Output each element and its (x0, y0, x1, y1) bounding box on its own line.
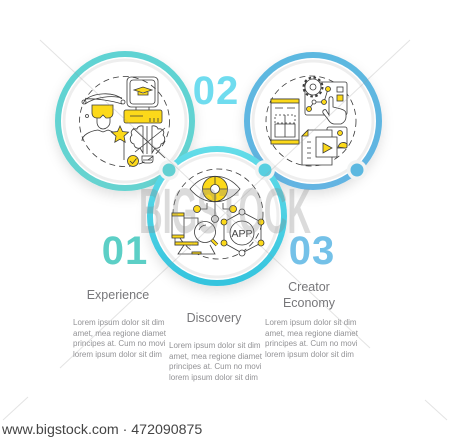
icon: monitor with graduation cap (127, 77, 158, 110)
icon: dashboard with gear (304, 78, 347, 115)
icon: check badge (128, 156, 138, 166)
icon: eye with network (190, 176, 240, 222)
text block: creator economy: amet, mea regione diamet (265, 329, 359, 338)
number: 03: 03 (289, 229, 335, 273)
text block: discovery: lorem ipsum dolor sit dim (169, 373, 258, 382)
heading: experience: Experience (87, 288, 149, 302)
circle: discovery ring (150, 149, 284, 283)
number: 01: 01 (102, 229, 148, 273)
icon: media files (302, 127, 347, 165)
text block: experience: lorem ipsum dolor sit dim (73, 350, 162, 359)
circle: creator economy ring (247, 55, 379, 187)
icon: keyboard (124, 110, 162, 123)
text block: discovery: principes at. Cum no movi (169, 362, 262, 371)
text block: experience: amet, mea regione diamet (73, 329, 167, 338)
connector dot: left (159, 160, 179, 180)
icon: devices and magnifier (172, 213, 217, 254)
text block: creator economy: lorem ipsum dolor sit dim (265, 350, 354, 359)
icon: discovery cluster (172, 169, 264, 259)
text block: experience: principes at. Cum no movi (73, 339, 166, 348)
icon: app hexagon: APP (231, 228, 253, 240)
number: 02: 02 (193, 69, 239, 113)
icon: phone layout (271, 99, 299, 144)
icon: experience cluster (80, 76, 170, 166)
connector dot: right (347, 160, 367, 180)
icon: pointing hand (323, 97, 346, 124)
icon: brain bulb (130, 126, 165, 163)
text block: experience: Lorem ipsum dolor sit dim (73, 318, 165, 327)
text block: creator economy: Lorem ipsum dolor sit dim (265, 318, 357, 327)
heading: creator economy: Economy (283, 296, 336, 310)
icon: VR headset person (82, 94, 125, 160)
footer credit: www.bigstock.com · 472090875 (1, 422, 202, 438)
icon: star (112, 126, 128, 142)
circle: experience ring (58, 54, 192, 188)
heading: discovery: Discovery (187, 311, 242, 325)
text block: creator economy: principes at. Cum no movi (265, 339, 358, 348)
connector dot: middle (255, 160, 275, 180)
text block: discovery: amet, mea regione diamet (169, 352, 263, 361)
heading: creator economy: Creator (288, 280, 330, 294)
icon: creator cluster (266, 76, 356, 166)
text block: discovery: Lorem ipsum dolor sit dim (169, 341, 261, 350)
